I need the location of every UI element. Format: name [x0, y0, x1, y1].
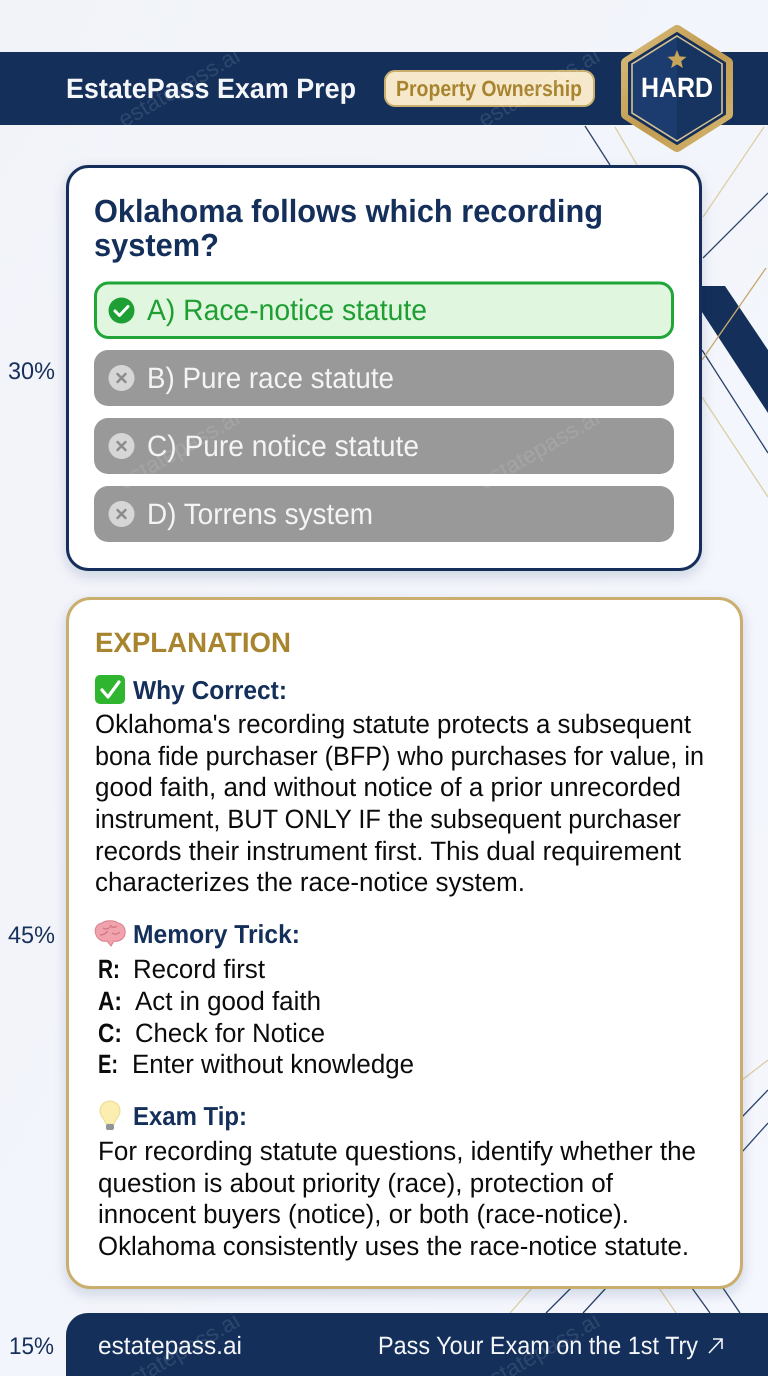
option D [94, 486, 674, 542]
mnemonic list: A: [98, 986, 122, 1016]
why correct body [95, 709, 704, 897]
why correct heading: Why Correct: [133, 675, 287, 705]
why correct body: records their instrument first. This dual requirement [95, 836, 682, 866]
icon: check box [95, 675, 125, 704]
watermarks: estatepass.ai [114, 42, 244, 132]
footer site name: estatepass.ai [98, 1332, 242, 1360]
watermarks: estatepass.ai [114, 404, 244, 494]
difficulty badge: HARD [641, 72, 713, 103]
mnemonic list [98, 954, 414, 1079]
why correct body: Oklahoma's recording statute protects a subsequent [95, 709, 692, 739]
icon: star [668, 50, 686, 68]
exam tip body: For recording statute questions, identify whether the [98, 1136, 696, 1166]
label: 30 percent: 30% [8, 358, 55, 385]
option C [94, 418, 674, 474]
difficulty badge [627, 31, 727, 146]
header bar [0, 52, 768, 125]
exam tip body: innocent buyers (notice), or both (race-notice). [98, 1199, 629, 1229]
watermarks: estatepass.ai [474, 404, 604, 494]
panel: question card [68, 166, 700, 570]
panel: explanation card [68, 598, 742, 1288]
watermarks: estatepass.ai [474, 42, 604, 132]
mnemonic list: C: [98, 1018, 122, 1048]
mnemonic list: Check for Notice [135, 1018, 325, 1048]
icon: light bulb [100, 1101, 120, 1130]
category pill: Property Ownership [396, 76, 582, 101]
option A correct: A) Race-notice statute [147, 294, 427, 327]
mnemonic list: Record first [133, 954, 266, 984]
why correct body: characterizes the race-notice system. [95, 867, 525, 897]
memory trick heading: Memory Trick: [133, 919, 300, 949]
option C: C) Pure notice statute [147, 430, 419, 463]
exam tip body: question is about priority (race), protection of [98, 1168, 614, 1198]
why correct body: good faith, and without notice of a prior unrecorded [95, 772, 681, 802]
memory trick section [95, 919, 414, 1079]
exam tip body [98, 1136, 696, 1261]
icon: brain [95, 921, 125, 946]
exam tip section [98, 1101, 696, 1261]
question text: system? [94, 227, 219, 263]
exam tip heading: Exam Tip: [133, 1101, 247, 1131]
option A correct [96, 283, 672, 338]
option B: B) Pure race statute [147, 362, 394, 395]
mnemonic list: Enter without knowledge [132, 1049, 414, 1079]
option D: D) Torrens system [147, 498, 373, 531]
question text [94, 193, 603, 263]
decorative navy band [700, 286, 768, 413]
category pill [385, 71, 594, 106]
mnemonic list: R: [98, 954, 120, 984]
question text: Oklahoma follows which recording [94, 193, 603, 229]
option B [94, 350, 674, 406]
mnemonic list: Act in good faith [135, 986, 321, 1016]
footer bar [66, 1313, 768, 1376]
mnemonic list: E: [98, 1049, 118, 1079]
explanation heading: EXPLANATION [95, 627, 291, 658]
icon: arrow [709, 1339, 722, 1353]
header title: EstatePass Exam Prep [66, 73, 356, 104]
footer tagline: Pass Your Exam on the 1st Try [378, 1332, 698, 1360]
label: 15 percent: 15% [9, 1333, 54, 1360]
label: 45 percent: 45% [8, 922, 55, 949]
watermarks [114, 42, 604, 1376]
why correct body: instrument, BUT ONLY IF the subsequent purchaser [95, 804, 681, 834]
why correct section [95, 675, 704, 897]
why correct body: bona fide purchaser (BFP) who purchases for value, in [95, 741, 704, 771]
exam tip body: Oklahoma consistently uses the race-notice statute. [98, 1231, 689, 1261]
